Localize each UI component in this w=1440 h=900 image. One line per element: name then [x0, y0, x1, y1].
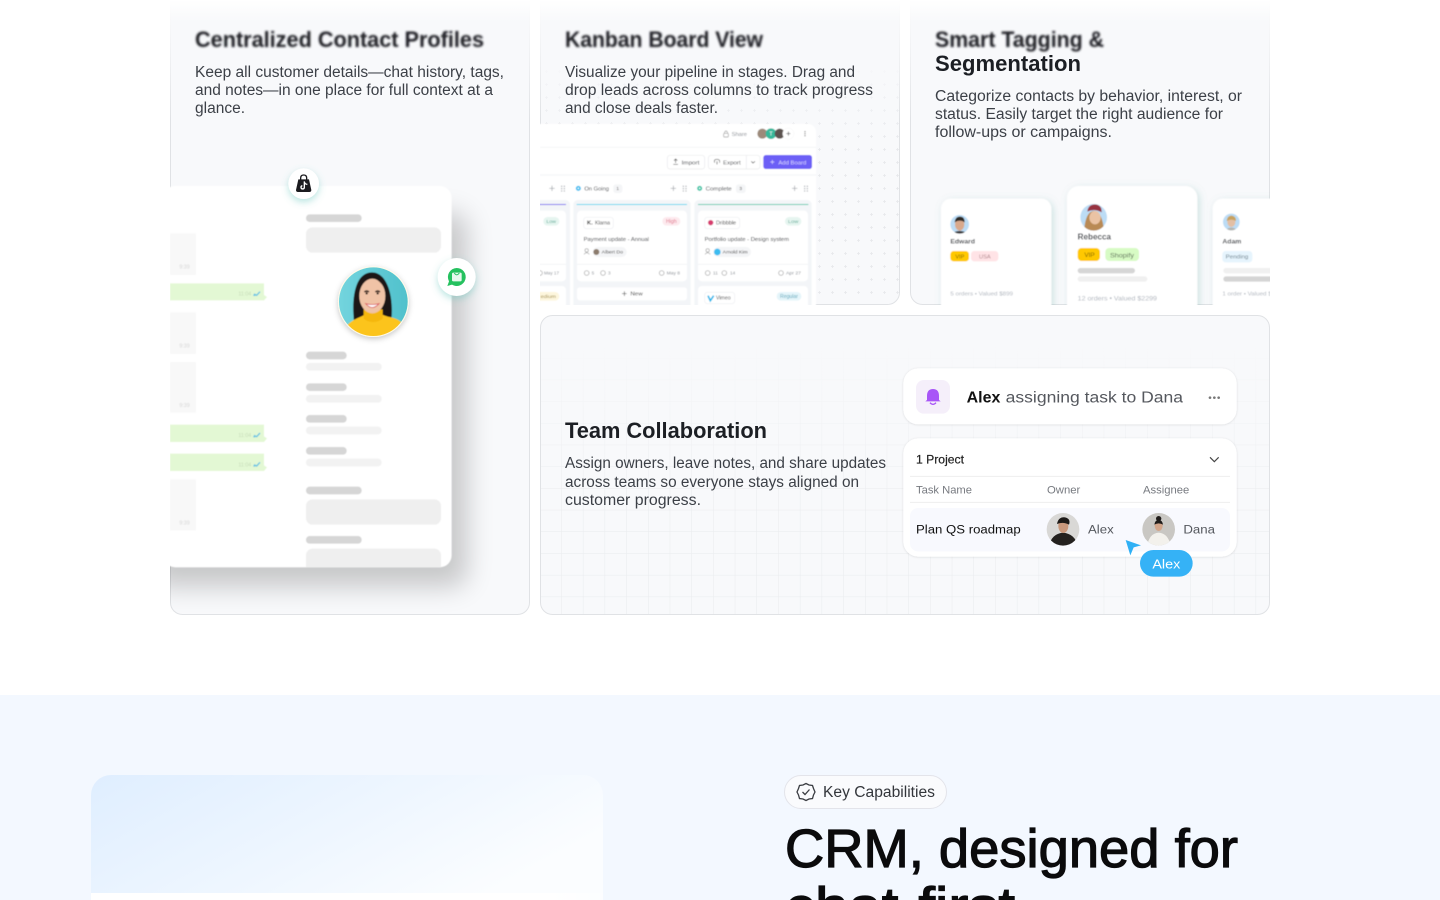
- board toolbar buttons: [667, 155, 812, 169]
- badge: key capabilities: Key Capabilities: [823, 784, 935, 801]
- board header: share and members: Share: [732, 132, 747, 138]
- text block: profiles description: Keep all customer details—chat history, tags,: [195, 64, 504, 81]
- chat bubbles: [170, 233, 267, 530]
- contact card: Edward: [940, 197, 1056, 305]
- contact card: Rebecca: VIP: [1084, 252, 1095, 259]
- chat bubbles: 11:04: [238, 292, 251, 298]
- column: on going: Albert Do: [602, 250, 623, 255]
- column headers: On Going: [584, 187, 609, 193]
- chat bubbles: 9:39: [179, 344, 190, 350]
- text block: collaboration description: Assign owners, leave notes, and share updates: [565, 455, 886, 472]
- column: backlog: Low: [546, 219, 557, 224]
- illustration: contact profile window: [170, 168, 482, 599]
- table row: Dana: [1183, 523, 1215, 537]
- heading: smart tagging and segmentation: Segmentation: [935, 51, 1081, 76]
- column: complete: 14: [730, 271, 736, 276]
- contact card: Adam: 1 order • Valued $: [1222, 292, 1272, 298]
- column headers: Complete: [706, 187, 732, 193]
- text block: segmentation description: Categorize contacts by behavior, interest, or: [935, 88, 1242, 105]
- project table card: [903, 438, 1237, 557]
- column: complete: 11: [713, 271, 718, 276]
- icon: whatsapp business badge: [438, 258, 476, 296]
- project table card: 1 Project: [916, 452, 965, 466]
- text block: kanban description: drop leads across columns to track progress: [565, 82, 873, 99]
- illustration: contact cards: [940, 184, 1272, 305]
- illustration: kanban board: [540, 124, 816, 305]
- project table card: Assignee: [1143, 485, 1189, 497]
- text block: segmentation description: follow-ups or campaigns.: [935, 124, 1112, 141]
- panel: capability preview card: [91, 775, 603, 900]
- cursor and name tag: Alex: [1152, 556, 1181, 571]
- contact card: Edward: Edward: [950, 239, 975, 246]
- column headers: 1: [616, 186, 619, 191]
- icon: tiktok shop badge: [288, 168, 319, 199]
- contact card: Edward: VIP: [955, 254, 965, 260]
- contact card: Rebecca: [1066, 184, 1202, 305]
- chat bubbles: 11:04: [238, 462, 251, 468]
- text block: profiles description: glance.: [195, 100, 245, 117]
- chat bubbles: 9:39: [179, 521, 190, 527]
- skeleton fields: [306, 214, 441, 567]
- text block: kanban description: Visualize your pipeline in stages. Drag and: [565, 64, 855, 81]
- board toolbar buttons: Export: [723, 160, 741, 166]
- heading: kanban board view: Kanban Board View: [565, 27, 764, 52]
- column: complete: Portfolio update - Design system: [705, 237, 789, 243]
- column: complete: Dribbble: [716, 221, 736, 227]
- text block: collaboration description: customer progress.: [565, 492, 701, 509]
- board toolbar buttons: Add Board: [778, 160, 806, 166]
- column: on going: Payment update - Annual: [584, 237, 649, 243]
- board header: share and members: T: [769, 132, 773, 138]
- contact card: Adam: [1212, 197, 1270, 305]
- panel: team collaboration: [540, 316, 1270, 614]
- column headers: 3: [739, 186, 742, 191]
- text block: segmentation description: status. Easily target the right audience for: [935, 106, 1223, 123]
- column: backlog: edium: [541, 294, 556, 299]
- column: on going: K.: [587, 221, 593, 227]
- contact card: Rebecca: Rebecca: [1078, 233, 1112, 242]
- cursor and name tag: [1126, 540, 1193, 577]
- column: complete: Vimeo: [716, 296, 731, 302]
- text block: collaboration description: [565, 455, 886, 509]
- table row: [917, 513, 1215, 546]
- panel: smart tagging and segmentation: [910, 16, 1270, 305]
- column: on going: 5: [592, 271, 595, 276]
- column headers: [549, 184, 808, 193]
- column: on going: 3: [608, 271, 611, 276]
- notification card: Alex: [967, 389, 1001, 406]
- heading: smart tagging and segmentation: [935, 27, 1104, 76]
- chat bubbles: 9:39: [179, 265, 190, 271]
- heading: smart tagging and segmentation: Smart Tagging &: [935, 27, 1104, 52]
- project table card: Task Name: [916, 485, 972, 497]
- board toolbar buttons: Import: [682, 160, 700, 166]
- icon: bell: [916, 380, 950, 414]
- contact card: Edward: USA: [979, 254, 991, 260]
- column: backlog: May 17: [544, 271, 559, 276]
- contact card: Rebecca: Shopify: [1110, 252, 1135, 259]
- text block: kanban description: and close deals faster.: [565, 100, 718, 117]
- text block: segmentation description: [935, 88, 1242, 141]
- chat bubbles: 11:04: [238, 433, 251, 439]
- table row: Plan QS roadmap: [916, 523, 1021, 537]
- heading: centralized contact profiles: Centralized Contact Profiles: [195, 27, 484, 52]
- column: on going: Klarna: [595, 221, 610, 227]
- column: on going: New: [630, 292, 643, 298]
- project table card: Owner: [1047, 485, 1081, 497]
- contact card: Adam: Pending: [1226, 254, 1248, 260]
- contact card: Edward: 5 orders • Valued $899: [950, 292, 1013, 298]
- panel: kanban board view: [538, 0, 900, 310]
- column: complete: Low: [788, 219, 799, 224]
- column: backlog: [538, 200, 570, 310]
- column: complete: Arnold Kim: [723, 250, 748, 255]
- contact card: Adam: Adam: [1222, 239, 1241, 246]
- illustration: task assignment: [902, 368, 1238, 577]
- heading: team collaboration: Team Collaboration: [565, 418, 767, 443]
- column: complete: Regular: [780, 294, 798, 300]
- avatar: customer photo: [337, 265, 410, 340]
- column: on going: [573, 200, 691, 310]
- board header: share and members: [724, 128, 806, 139]
- contact card: Rebecca: 12 orders • Valued $2299: [1078, 296, 1158, 303]
- column: on going: May 8: [667, 271, 680, 276]
- notification card: [903, 368, 1237, 424]
- text block: profiles description: and notes—in one place for full context at a: [195, 82, 493, 99]
- section: key capabilities background: [0, 695, 1440, 900]
- column: complete: [694, 200, 812, 310]
- column: on going: High: [666, 219, 677, 225]
- chat bubbles: 9:39: [179, 403, 190, 409]
- panel: centralized contact profiles: [150, 0, 530, 614]
- table row: Alex: [1088, 523, 1115, 537]
- notification card: assigning task to Dana: [1006, 389, 1184, 406]
- panel: chat window: [163, 186, 452, 567]
- badge: key capabilities: [784, 776, 946, 808]
- text block: profiles description: [195, 64, 504, 117]
- column: complete: Apr 27: [786, 271, 801, 276]
- heading: crm designed for chat-first: CRM, designed for: [785, 819, 1238, 879]
- text block: kanban description: [565, 64, 873, 117]
- text block: collaboration description: across teams so everyone stays aligned on: [565, 474, 859, 491]
